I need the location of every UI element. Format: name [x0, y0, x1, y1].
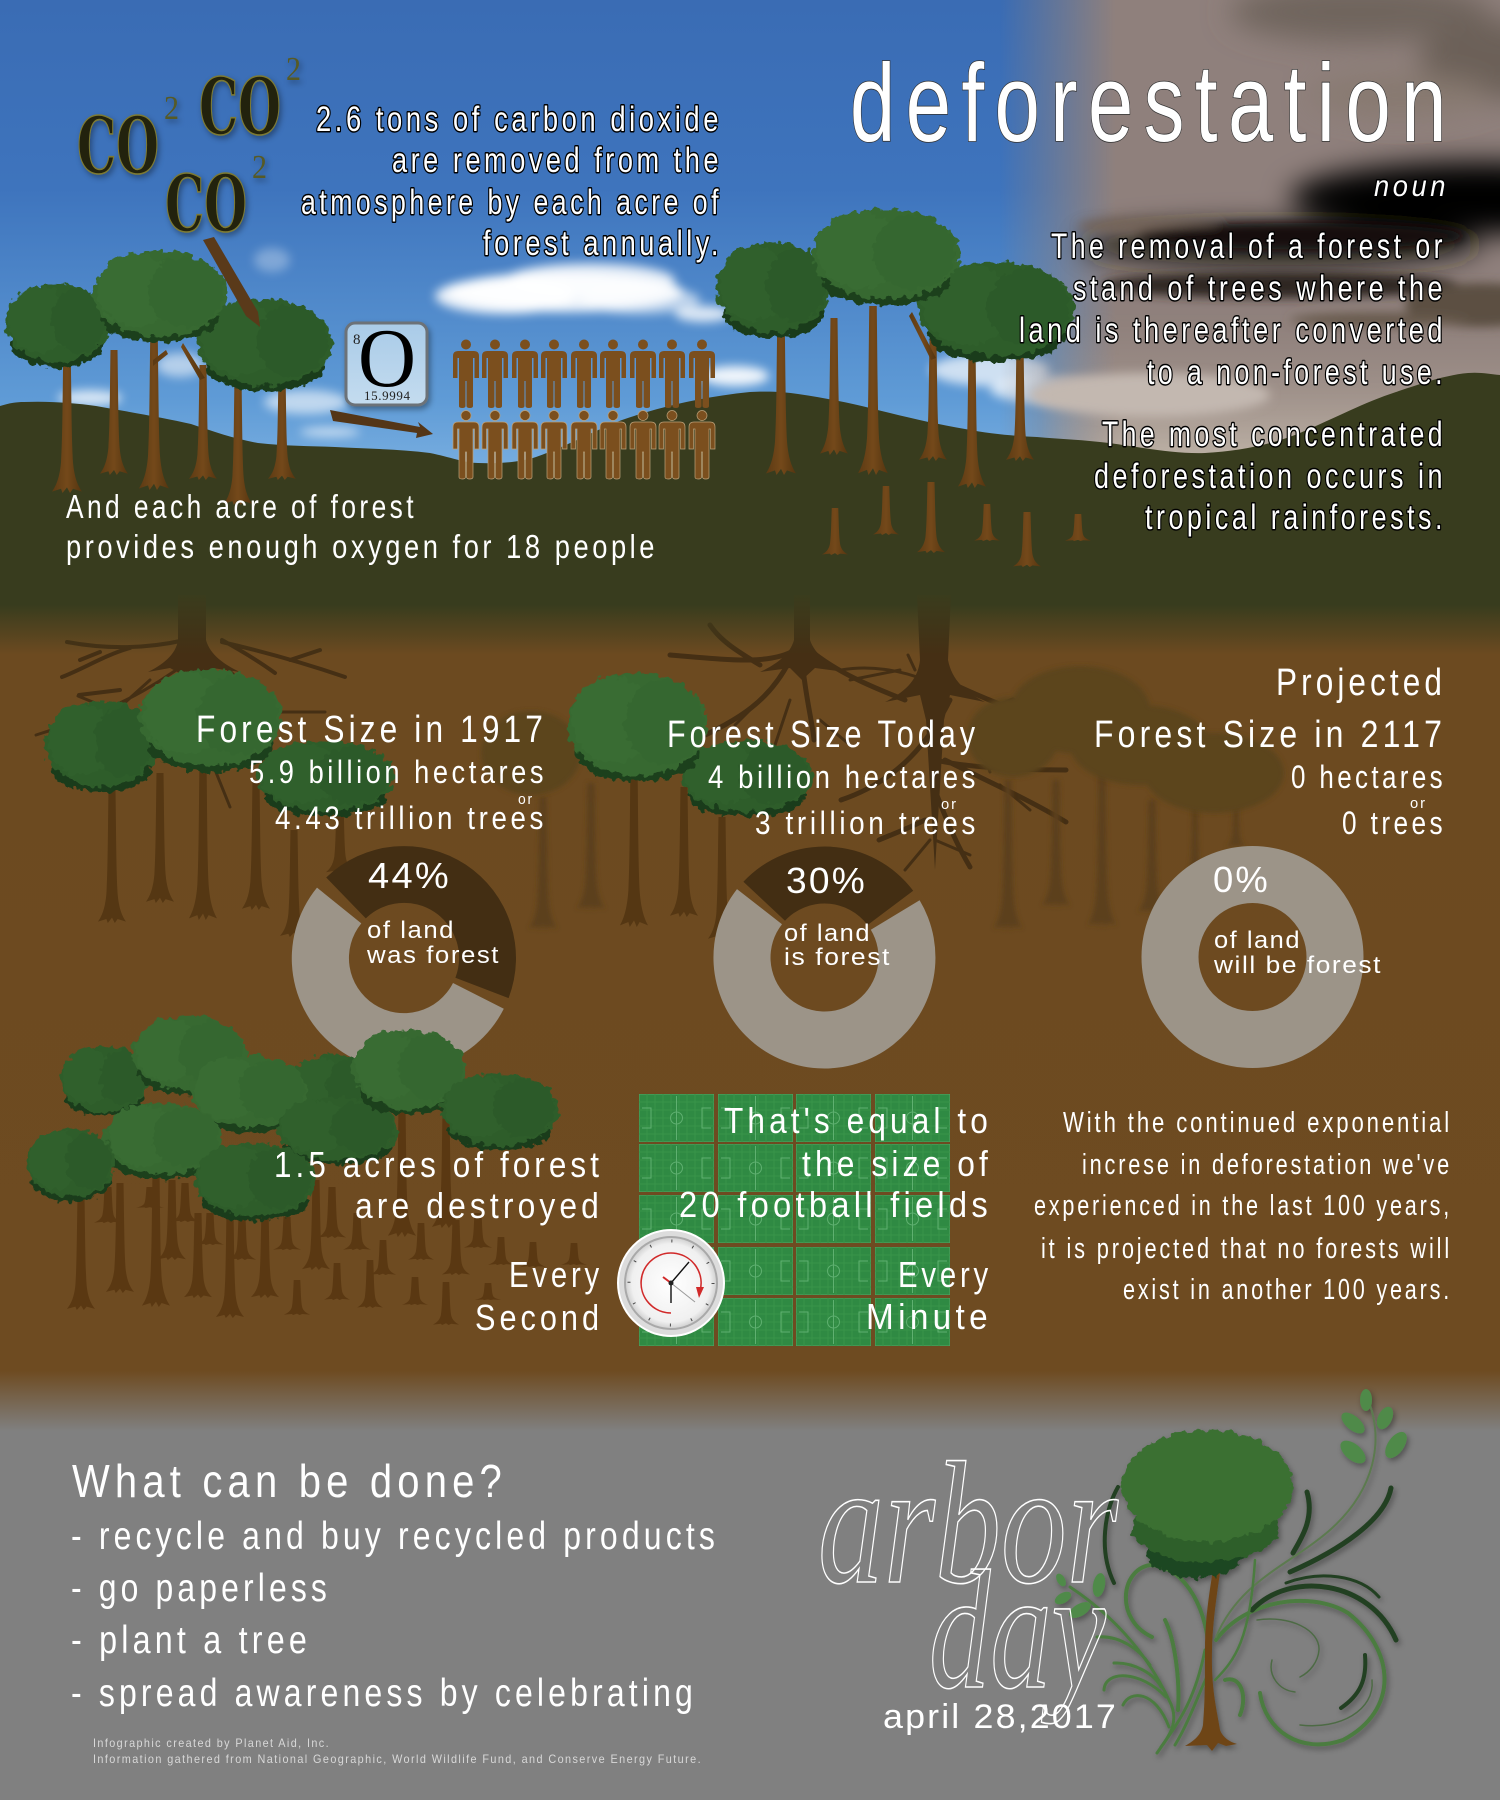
carbon dioxide molecules	[77, 51, 301, 250]
faded crowns	[481, 666, 1284, 813]
donut chart: 44%: of land	[367, 917, 455, 944]
icon: oxygen element card: 8	[353, 332, 360, 348]
text: football field comparison: That's equal to	[724, 1100, 992, 1141]
text: carbon dioxide fact: 2.6 tons of carbon dioxide	[316, 100, 722, 139]
donut chart: 30%: is forest	[784, 944, 891, 971]
text: football field comparison: Every	[898, 1254, 992, 1295]
text block: forest size in 1917: 4.43 trillion trees	[275, 800, 547, 836]
text block: forest size in 1917	[196, 709, 547, 836]
trunks	[766, 306, 1034, 488]
leaves	[1053, 1389, 1411, 1621]
text block: projected forest size 2117	[1094, 662, 1446, 841]
forest group top left	[5, 251, 333, 505]
text block: forest size today: 4 billion hectares	[708, 759, 979, 795]
donut chart: 44%: was forest	[366, 942, 500, 969]
text: noun label: noun	[1374, 170, 1449, 203]
swirls	[1070, 1397, 1396, 1753]
donut chart: 0%: 0%	[1213, 859, 1270, 900]
tree roots under the surface	[36, 595, 1085, 870]
carbon dioxide molecules: 2	[252, 149, 267, 186]
donut chart: 30%: of land	[784, 920, 871, 947]
text block: projected forest size 2117: 0 trees	[1342, 805, 1446, 841]
text: what can be done list: - plant a tree	[71, 1619, 311, 1662]
donut chart: 0%: of land	[1214, 927, 1301, 954]
donut chart: 44%: 44%	[368, 855, 451, 896]
arrow: oxygen to people	[330, 410, 433, 438]
text block: forest size in 1917: 5.9 billion hectares	[249, 754, 547, 790]
text: projection paragraph	[1034, 1107, 1452, 1306]
donut chart: 44%	[292, 846, 516, 1070]
row two	[453, 410, 715, 479]
text: football field comparison: the size of	[802, 1143, 992, 1184]
forest in soil, 1917 and today	[45, 666, 1284, 940]
lettering: arbor day: day	[929, 1536, 1106, 1724]
text block: forest size in 1917: Forest Size in 1917	[196, 709, 547, 751]
stumps	[284, 1223, 587, 1325]
trunks	[67, 1107, 492, 1318]
donut chart: 30%	[713, 847, 935, 1068]
trunks	[98, 757, 736, 940]
carbon dioxide molecules: 2	[164, 90, 179, 127]
icon: oxygen element card: 15.9994	[364, 388, 410, 403]
donut chart: 30%: 30%	[786, 860, 867, 901]
lettering: arbor day: april 28,2017	[883, 1698, 1118, 1736]
text: oxygen fact	[66, 488, 658, 565]
text: credits	[93, 1736, 702, 1766]
text block: forest size today: or	[941, 796, 958, 813]
sky background	[0, 0, 1500, 520]
trunk	[1185, 1535, 1237, 1751]
ground: hills and soil	[0, 373, 1500, 1800]
text: definition	[1019, 227, 1446, 537]
icon: clock	[618, 1230, 724, 1336]
text: football field comparison	[679, 1100, 992, 1337]
text: what can be done list: What can be done?	[72, 1455, 507, 1507]
carbon dioxide molecules: CO	[77, 101, 159, 192]
lettering: arbor day: arbor	[818, 1426, 1119, 1620]
trunks	[52, 335, 296, 505]
text: acres destroyed every second: are destroyed	[355, 1185, 603, 1226]
text: acres destroyed every second: 1.5 acres of forest	[274, 1144, 603, 1185]
storm clouds	[1080, 0, 1500, 265]
text block: projected forest size 2117: Projected	[1276, 662, 1446, 704]
text: carbon dioxide fact: are removed from the	[392, 141, 722, 180]
crowns	[5, 251, 333, 391]
text: credits: Information gathered from National Geographic, World Wildlife Fund, and Conserve Energy Future.	[93, 1752, 702, 1766]
text: what can be done list: - go paperless	[71, 1567, 331, 1610]
text: carbon dioxide fact: forest annually.	[483, 224, 722, 263]
sky clouds	[58, 248, 1130, 437]
text block: projected forest size 2117: or	[1410, 795, 1427, 812]
text block: projected forest size 2117: 0 hectares	[1291, 759, 1446, 795]
text block: forest size in 1917: or	[518, 791, 534, 808]
text: acres destroyed every second	[274, 1144, 603, 1338]
arrow: CO2 into trees	[203, 237, 260, 327]
text block: forest size today: Forest Size Today	[667, 714, 979, 756]
illustration: arbor day tree and swirls	[1053, 1389, 1411, 1753]
carbon dioxide molecules: CO	[165, 159, 247, 250]
crown	[1121, 1430, 1293, 1578]
text: what can be done list	[71, 1455, 719, 1715]
donut chart: 0%: will be forest	[1213, 952, 1382, 979]
crowns	[716, 209, 1075, 362]
text: acres destroyed every second: Every	[509, 1254, 603, 1295]
root system centre	[670, 595, 905, 760]
text block: forest size today	[667, 714, 979, 841]
forest being cut, lower left	[27, 1016, 587, 1325]
people icons: 18 people	[453, 340, 715, 479]
carbon dioxide molecules: CO	[199, 62, 281, 153]
football fields grid	[639, 1094, 950, 1346]
root system right	[841, 595, 1085, 870]
lettering: arbor day	[818, 1426, 1119, 1736]
carbon dioxide molecules: 2	[286, 51, 301, 88]
faded trunks	[529, 767, 1246, 930]
text: football field comparison: 20 football fields	[679, 1184, 992, 1225]
text: carbon dioxide fact: atmosphere by each acre of	[301, 183, 722, 222]
stumps	[822, 482, 1091, 567]
icon: oxygen element card: O	[358, 312, 416, 405]
text: football field comparison: Minute	[866, 1296, 992, 1337]
text: credits: Infographic created by Planet Aid, Inc.	[93, 1736, 330, 1750]
text: oxygen fact: And each acre of forest	[66, 488, 417, 525]
text block: projected forest size 2117: Forest Size in 2117	[1094, 714, 1446, 756]
crowns	[27, 1016, 559, 1221]
text: oxygen fact: provides enough oxygen for 18 people	[66, 528, 658, 565]
text: carbon dioxide fact	[301, 100, 722, 263]
text block: forest size today: 3 trillion trees	[755, 805, 979, 841]
text: what can be done list: - spread awareness by celebrating	[71, 1672, 697, 1715]
text: what can be done list: - recycle and buy recycled products	[71, 1515, 719, 1558]
root system left	[36, 595, 345, 807]
forest group top right	[716, 209, 1091, 567]
text: acres destroyed every second: Second	[475, 1297, 603, 1338]
crowns	[45, 669, 813, 816]
row one	[453, 340, 715, 408]
donut chart: 0%	[1170, 859, 1382, 1040]
